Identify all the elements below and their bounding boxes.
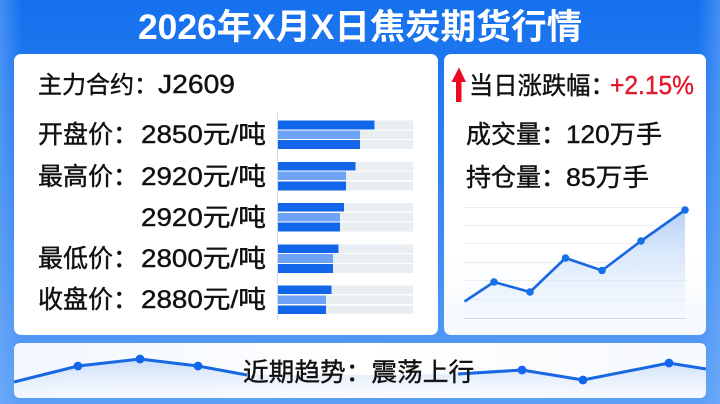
trend line (14, 355, 706, 398)
row: high price: 2920元/吨 (141, 163, 266, 191)
bars: high (278, 162, 413, 190)
row: close price (38, 286, 266, 314)
open interest: 85万手 (566, 164, 649, 192)
row: close price: 2880元/吨 (141, 286, 266, 314)
title: 2026年X月X日焦炭期货行情 (138, 8, 582, 47)
icon: red up arrow (452, 68, 466, 102)
volume (466, 121, 662, 149)
main contract: J2609 (158, 69, 235, 99)
row: high price: 最高价： (38, 163, 138, 191)
daily change: +2.15% (610, 72, 694, 100)
open interest (466, 164, 649, 192)
daily change: 当日涨跌幅： (469, 73, 615, 100)
bars: open (278, 120, 413, 149)
bars: third row (278, 203, 413, 232)
row: open price: 开盘价： (38, 121, 138, 149)
row: low price (38, 245, 266, 273)
row: close price: 收盘价： (38, 286, 138, 314)
main contract: 主力合约： (38, 72, 158, 99)
bars: low (278, 244, 413, 273)
row: open price (38, 121, 266, 149)
row: low price: 最低价： (38, 245, 138, 273)
volume: 成交量： (466, 121, 566, 149)
row: high price (38, 163, 266, 191)
panel: contract prices (14, 54, 438, 335)
row: low price: 2800元/吨 (141, 245, 266, 273)
panel: recent trend (14, 343, 706, 398)
bar chart (277, 113, 413, 320)
main contract (38, 69, 235, 99)
row: open price: 2850元/吨 (141, 121, 266, 149)
row: unlabelled price: 2920元/吨 (141, 204, 266, 232)
line chart (464, 206, 689, 318)
trend text: 近期趋势：震荡上行 (243, 358, 474, 387)
volume: 120万手 (566, 121, 662, 149)
daily change (469, 72, 694, 100)
bars: close (278, 286, 413, 314)
open interest: 持仓量： (466, 164, 566, 192)
panel: daily statistics (444, 54, 706, 335)
